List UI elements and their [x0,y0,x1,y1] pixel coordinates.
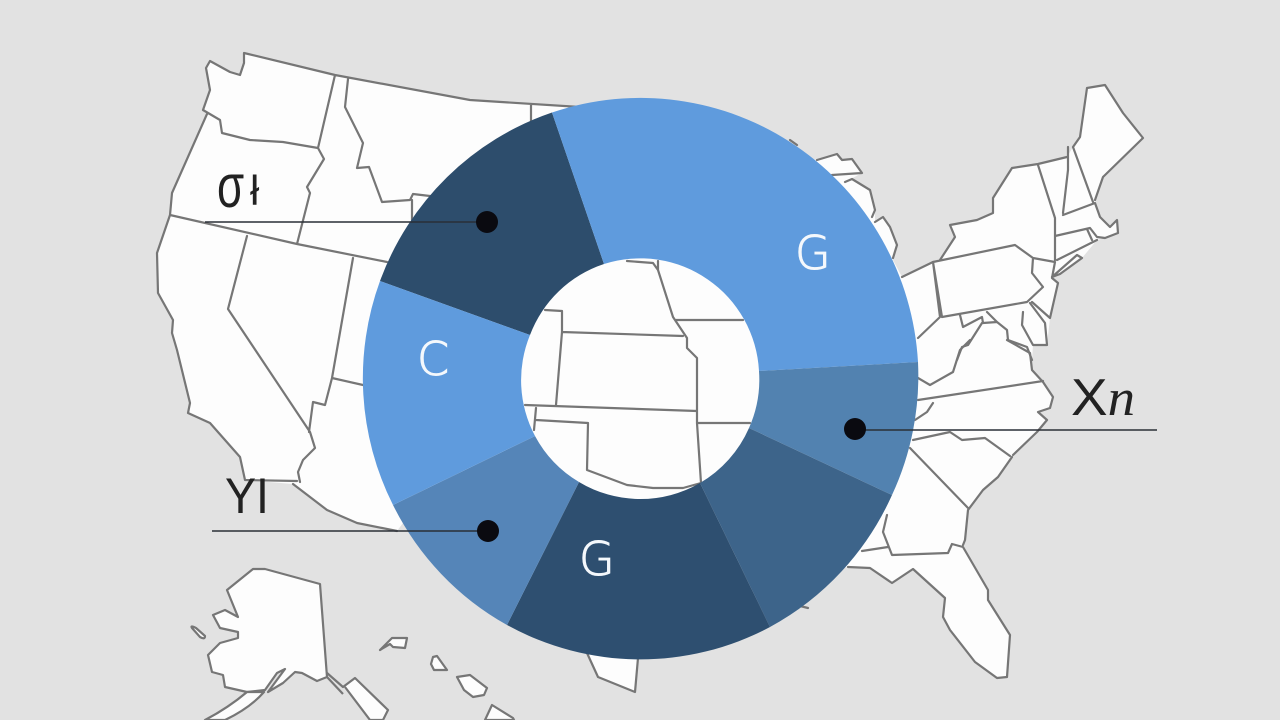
marker dot [476,211,498,233]
marker dot [844,418,866,440]
label: C on left segment: C [417,332,449,386]
map: central state borders seen through the donut hole [525,261,750,488]
segment: mid blue lower left [393,436,579,625]
donut chart [363,98,918,659]
map: great lakes states [790,140,933,608]
callout: lower left [212,468,499,542]
segment: slate blue lower right [700,428,892,627]
map: contiguous states silhouette [157,53,1143,692]
label: G on large segment: G [795,226,831,280]
map: western state borders [157,53,580,531]
callout label: Xn [1071,369,1135,427]
callout label: YI [225,468,269,524]
segment: light blue left [363,281,535,505]
map: southeast state borders [848,340,1053,678]
callout label second glyph: ł [250,167,260,214]
callout: right [844,369,1157,440]
leader line [855,429,1157,431]
segment: navy upper left [380,112,604,335]
segment: large light blue [552,98,918,371]
marker dot [477,520,499,542]
leader line [212,530,488,532]
map: Alaska island [192,626,205,638]
leader line [205,221,487,223]
segment: navy bottom [507,482,770,659]
map: Alaska [208,569,327,692]
map: Hawaii islands [380,638,514,720]
map: Alaska peninsula and panhandle [205,673,388,720]
label: G on bottom segment: G [579,532,615,586]
segment: mid blue right [749,362,918,495]
map: northeast state borders [918,85,1143,360]
US map [157,53,1143,720]
callout label: σ [217,153,244,221]
map: Texas tip [587,653,638,692]
map: Long Island [1052,255,1082,277]
callout: upper left [205,153,498,233]
